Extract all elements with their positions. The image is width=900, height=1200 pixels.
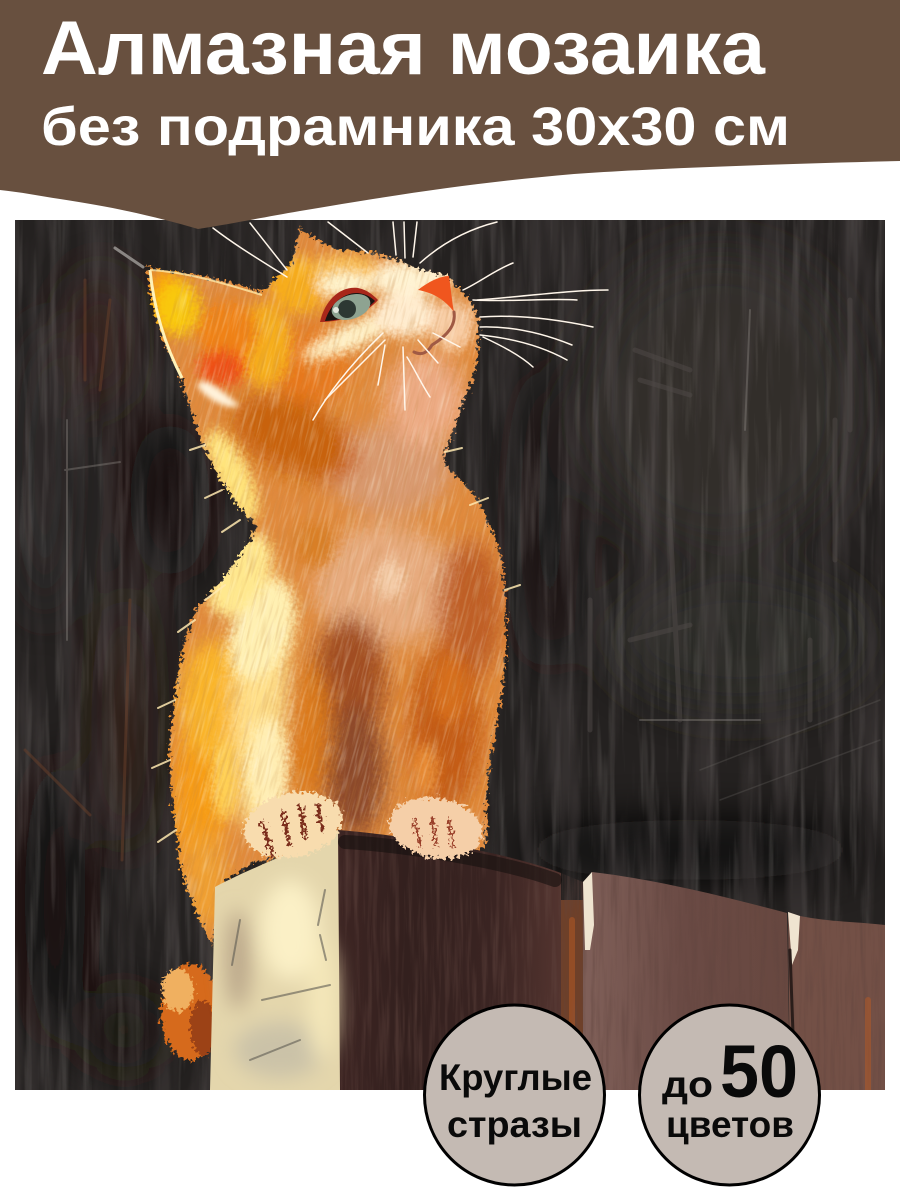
fence post 1 dark face — [338, 830, 561, 1090]
ear inner highlight — [115, 248, 262, 407]
eye — [320, 288, 378, 325]
badge word: up to: до — [662, 1064, 713, 1105]
fence gap — [555, 900, 590, 1090]
fence post 1 light face — [210, 830, 340, 1090]
badge text line 2: стразы — [447, 1104, 582, 1145]
fence post 2 — [583, 872, 790, 1090]
badge number: 50 — [720, 1030, 798, 1113]
title: Алмазная мозаика — [41, 6, 766, 91]
badge: up to 50 colours — [640, 1005, 820, 1185]
badge word: colours: цветов — [666, 1104, 794, 1145]
painting: kitten on a fence — [12, 155, 885, 1090]
fence — [210, 830, 885, 1090]
badge text line 1: Круглые — [439, 1057, 592, 1098]
nose and mouth — [414, 276, 454, 354]
fur tufts along the silhouette — [152, 445, 520, 842]
fur brush texture — [164, 229, 506, 944]
fence highlight strips — [583, 872, 800, 965]
right paw — [386, 793, 487, 862]
tail — [161, 964, 219, 1060]
kitten body — [147, 228, 506, 945]
subtitle: без подрамника 30х30 см — [41, 97, 790, 157]
header banner — [0, 0, 900, 229]
kitten — [114, 221, 609, 1064]
painting background — [15, 220, 885, 1090]
badge: round rhinestones — [424, 1005, 604, 1185]
whiskers — [213, 222, 608, 420]
wood grain — [338, 830, 885, 1090]
fence post 3 — [788, 912, 885, 1090]
left paw — [240, 788, 344, 860]
